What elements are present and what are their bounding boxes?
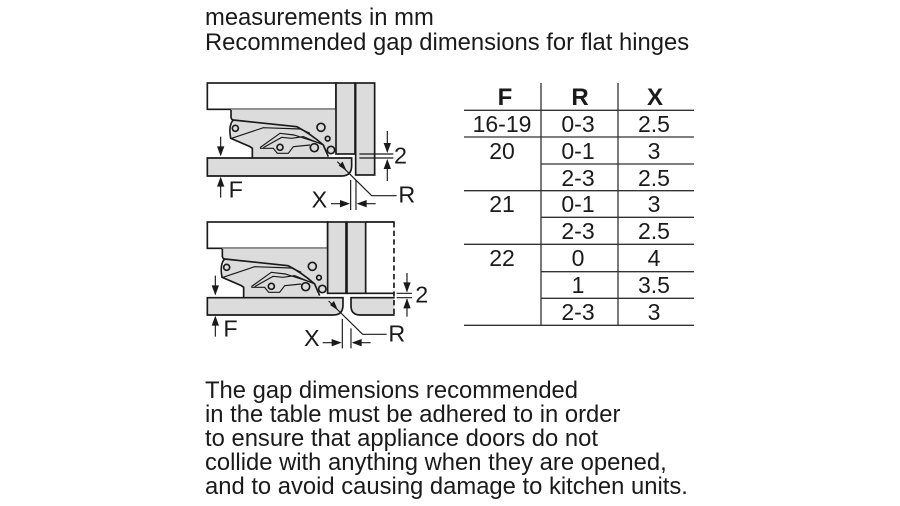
dimension X [312, 180, 376, 213]
column X: 2.5 [638, 111, 670, 137]
column R: 0-1 [561, 138, 595, 164]
column X: 3 [648, 138, 660, 164]
column F: 22 [489, 245, 515, 271]
column R: 2-3 [561, 299, 595, 325]
column R: 0-1 [561, 191, 595, 217]
column X: 3 [648, 191, 660, 217]
dimension X [304, 319, 371, 351]
column R: 0-3 [561, 111, 595, 137]
dimension F: F [229, 177, 243, 203]
column X: 2.5 [638, 218, 670, 244]
column X: 3.5 [638, 272, 670, 298]
table header: X [647, 84, 663, 111]
door [207, 298, 343, 315]
dimension 2: 2 [394, 143, 407, 169]
column R [561, 111, 595, 325]
text block: warning note: collide with anything when they are opened, [205, 449, 667, 476]
hinge mechanism [230, 109, 336, 158]
cabinet side panels [336, 83, 375, 175]
dimension X: X [312, 187, 328, 213]
column R: 2-3 [561, 218, 595, 244]
heading: measurements and gap title [205, 4, 689, 56]
text block: warning note: to ensure that appliance doors do not [205, 425, 598, 452]
table header: F [498, 84, 512, 111]
cabinet body [207, 83, 336, 109]
adjacent door [351, 298, 395, 315]
dimension R [329, 301, 405, 347]
text block: warning note: and to avoid causing damage to kitchen units. [205, 473, 688, 500]
table header: R [571, 84, 589, 111]
column R: 2-3 [561, 165, 595, 191]
column R: 0 [572, 245, 584, 271]
table: gap dimensions [464, 83, 694, 325]
adjacent unit outline [366, 222, 395, 293]
dimension F [212, 276, 238, 342]
text block: warning note: The gap dimensions recommended [205, 377, 578, 404]
column F: 21 [489, 191, 515, 217]
column X: 2.5 [638, 165, 670, 191]
hinge mechanism [221, 248, 328, 297]
column R: 1 [572, 272, 584, 298]
column F: 16-19 [473, 111, 531, 137]
dimension 2 [397, 273, 428, 317]
cabinet body [207, 222, 328, 248]
column X: 3 [648, 299, 660, 325]
diagram: flat hinge with adjacent door [207, 222, 428, 351]
diagram: flat hinge with cabinet side [207, 83, 415, 213]
text block: warning note: in the table must be adhered to in order [205, 401, 620, 428]
column F [473, 111, 531, 271]
dashed edge [391, 222, 396, 315]
dimension 2 [359, 131, 407, 181]
text block: warning note [205, 377, 688, 500]
dimension F: F [223, 316, 238, 342]
dimension R: R [388, 321, 405, 347]
heading: measurements and gap title: measurements in mm [205, 4, 434, 31]
heading: measurements and gap title: Recommended gap dimensions for flat hinges [205, 29, 689, 56]
column X: 4 [648, 245, 661, 271]
dimension F [217, 137, 243, 203]
dimension R: R [398, 181, 415, 207]
table grid [464, 83, 694, 325]
table header [498, 84, 663, 111]
column F: 20 [489, 138, 515, 164]
column X [638, 111, 670, 325]
dimension X: X [304, 325, 320, 351]
dimension R [337, 162, 415, 207]
door [207, 158, 352, 176]
dimension 2: 2 [415, 281, 428, 307]
cabinet side panels [328, 222, 366, 293]
